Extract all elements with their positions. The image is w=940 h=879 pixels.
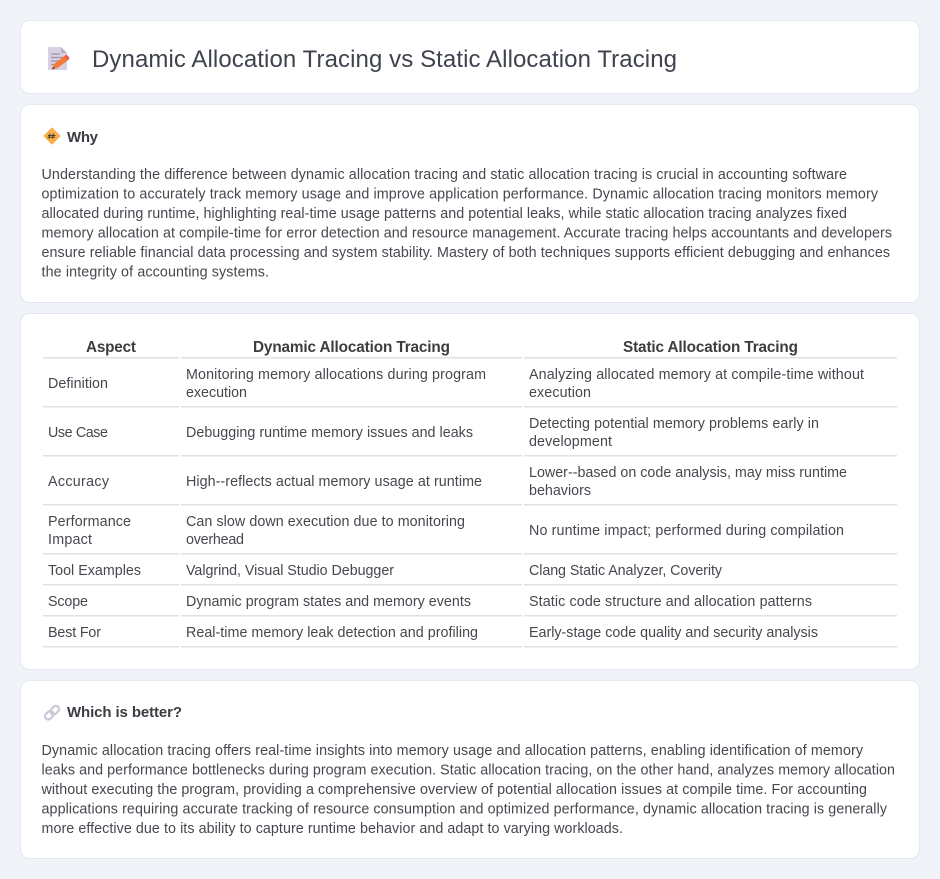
text block: why paragraph: the integrity of accounting systems. — [42, 264, 269, 280]
row: accuracy — [48, 465, 847, 499]
icon: link — [44, 705, 60, 721]
heading: which is better: Which is better? — [67, 704, 182, 721]
panel: title — [20, 20, 920, 94]
row: best for: Best For — [48, 625, 101, 641]
text block: which paragraph: without executing the program, providing a comprehensive overview of potential allocation issues at compile time. For accounting — [40, 782, 867, 798]
heading: why: Why — [67, 129, 99, 146]
row: best for: Early-stage code quality and security analysis — [529, 625, 818, 641]
row: use case: Use Case — [48, 425, 108, 441]
row: scope: Dynamic program states and memory events — [186, 594, 471, 610]
table header row: Static Allocation Tracing — [623, 339, 798, 356]
text block: which paragraph: more effective due to its ability to capture runtime behavior and adapt to varying workloads. — [42, 821, 623, 837]
row: accuracy: behaviors — [529, 483, 591, 499]
table header row — [86, 339, 798, 356]
row: scope: Scope — [48, 594, 88, 610]
row: definition: Monitoring memory allocations during program — [186, 367, 486, 383]
row: use case: Debugging runtime memory issues and leaks — [186, 425, 473, 441]
text block: why paragraph: allocated during runtime, highlighting real-time usage patterns and potential leaks, while static allocation tracing analyzes fixed — [42, 206, 847, 222]
row: tool examples — [48, 563, 723, 579]
row: performance impact — [48, 514, 844, 548]
row: tool examples: Clang Static Analyzer, Coverity — [529, 563, 723, 579]
table header row: Aspect — [86, 339, 136, 356]
row: accuracy: Lower--based on code analysis, may miss runtime — [529, 465, 847, 481]
row: performance impact: No runtime impact; performed during compilation — [529, 523, 844, 539]
row: scope: Static code structure and allocation patterns — [529, 594, 812, 610]
row: use case: development — [529, 434, 612, 450]
row: performance impact: Impact — [48, 532, 92, 548]
row: accuracy: Accuracy — [48, 474, 110, 490]
text block: why paragraph: memory allocation at compile-time for error detection and resource management. Accurate tracing helps accountants and developers — [42, 226, 892, 242]
text block: why paragraph: Understanding the difference between dynamic allocation tracing and static allocation tracing is crucial in accounting software — [42, 167, 847, 183]
row: tool examples: Valgrind, Visual Studio Debugger — [186, 563, 394, 579]
panel: which is better — [20, 680, 920, 858]
text block: why paragraph: ensure reliable financial data processing and system stability. Mastery of both techniques supports efficient debugging and enhances — [42, 245, 890, 261]
text block: which paragraph: applications requiring accurate tracking of resource consumption and optimized performance, dynamic allocation tracing is generally — [42, 802, 888, 818]
panel: why — [20, 104, 920, 302]
text block: which paragraph: Dynamic allocation tracing offers real-time insights into memory usage and allocation patterns, enabling identification of memory — [42, 743, 864, 759]
text block: which paragraph: leaks and performance bottlenecks during program execution. Static allocation tracing, on the other hand, analyzes memory allocation — [42, 762, 895, 778]
text block: why paragraph: optimization to accurately track memory usage and improve application performance. Dynamic allocation tracing monitors memory — [42, 186, 879, 202]
row: definition: Definition — [48, 376, 108, 392]
table header row: Dynamic Allocation Tracing — [253, 339, 450, 356]
row: use case — [48, 416, 819, 450]
panel: comparison table — [20, 314, 920, 670]
row: accuracy: High--reflects actual memory usage at runtime — [186, 474, 482, 490]
icon: orange diamond — [44, 128, 60, 144]
row: definition — [48, 367, 864, 401]
row: performance impact: Can slow down execution due to monitoring — [186, 514, 465, 530]
text block: why paragraph — [42, 167, 892, 280]
row: best for: Real-time memory leak detection and profiling — [186, 625, 478, 641]
row: definition: execution — [186, 385, 247, 401]
row: use case: Detecting potential memory problems early in — [529, 416, 819, 432]
row: definition: execution — [529, 385, 591, 401]
row: tool examples: Tool Examples — [48, 563, 141, 579]
row: performance impact: Performance — [48, 514, 131, 530]
icon: memo with pencil — [48, 47, 70, 70]
row: definition: Analyzing allocated memory at compile-time without — [529, 367, 864, 383]
text block: which paragraph — [40, 743, 895, 837]
row: scope — [48, 594, 812, 610]
title text: Dynamic Allocation Tracing vs Static Allocation Tracing — [92, 46, 677, 73]
row: performance impact: overhead — [186, 532, 244, 548]
row: best for — [48, 625, 818, 641]
